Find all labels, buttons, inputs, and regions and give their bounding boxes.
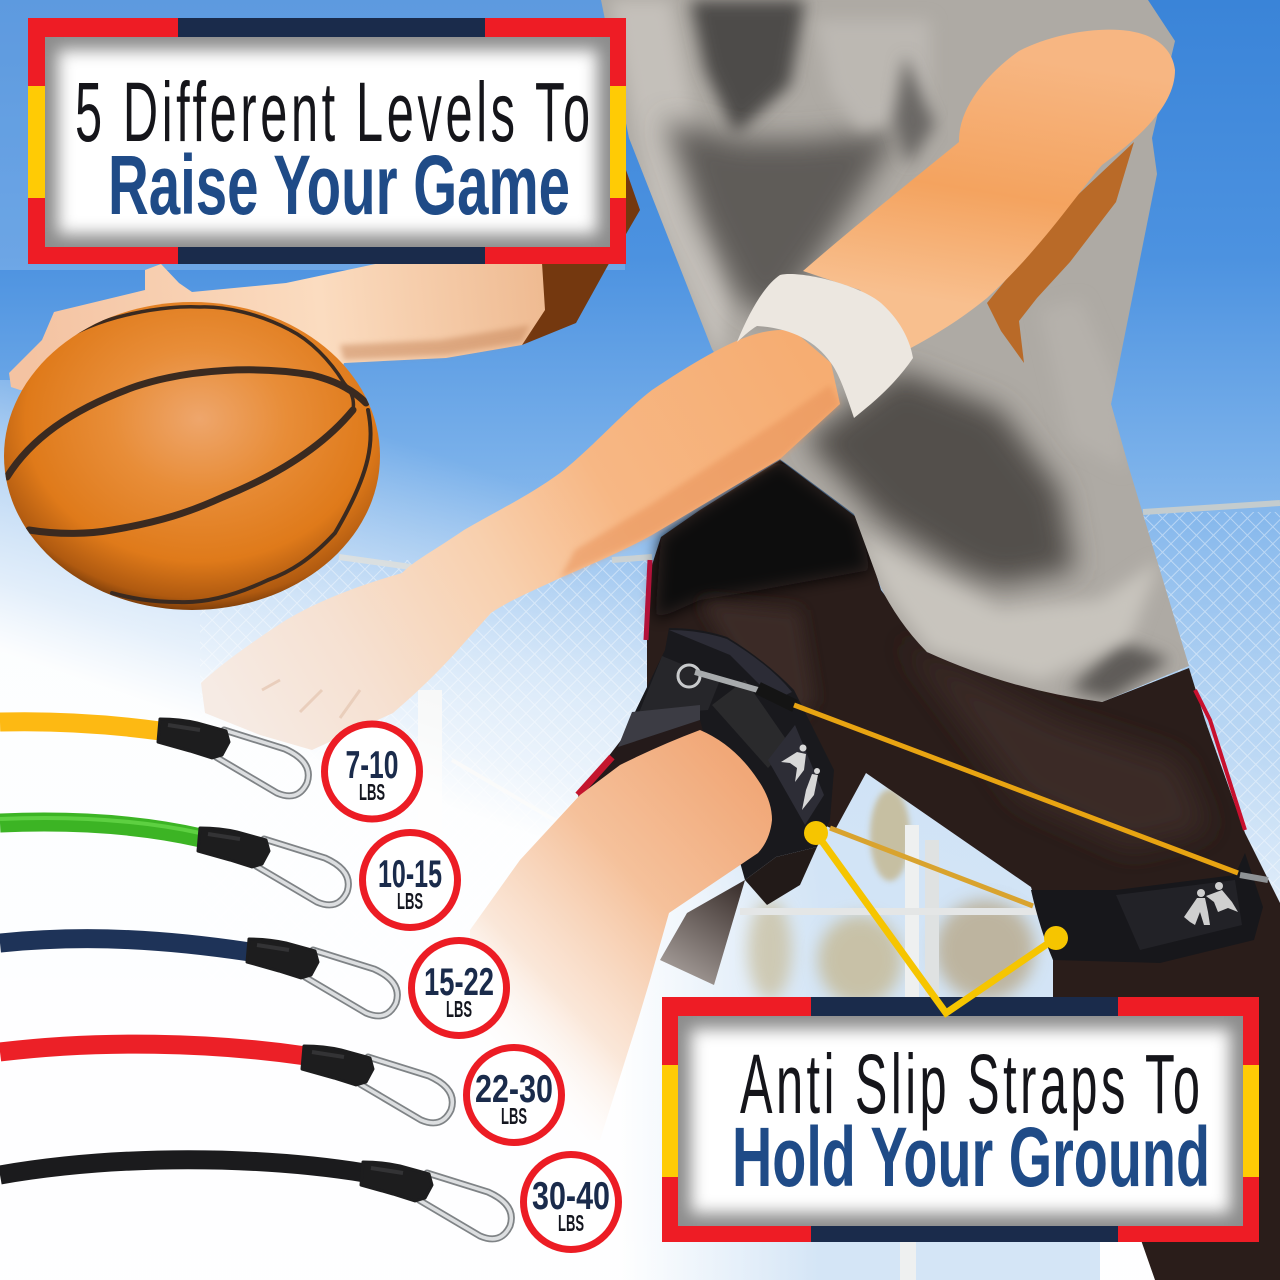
badge: 22-30 LBS: 22-30 [475, 1068, 553, 1111]
thigh strap [618, 628, 834, 880]
badge: 10-15 LBS [362, 832, 458, 928]
shorts [646, 460, 1280, 1280]
band: yellow 7-10 lbs [0, 719, 308, 796]
background: fence and trees behind the legs [620, 770, 1100, 1280]
badge: 15-22 LBS: 15-22 [424, 961, 494, 1004]
band: black 30-40 lbs [0, 1160, 511, 1239]
far arm holding the ball [9, 170, 640, 400]
resistance tube to thigh [794, 705, 1238, 873]
basketball [4, 302, 380, 610]
badge: 10-15 LBS: LBS [397, 888, 423, 914]
shirt [601, 0, 1189, 702]
band: red 22-30 lbs [0, 1044, 452, 1123]
badge: 7-10 LBS [324, 724, 420, 819]
near upper arm [803, 30, 1175, 349]
badge: 10-15 LBS: 10-15 [378, 853, 442, 896]
background: pale strip behind top box [0, 0, 625, 270]
badge: 7-10 LBS: LBS [359, 779, 385, 805]
badge: 22-30 LBS [466, 1048, 562, 1142]
badge: 22-30 LBS: LBS [501, 1103, 527, 1129]
badge: 7-10 LBS: 7-10 [346, 744, 398, 787]
badge: 30-40 LBS: 30-40 [532, 1175, 610, 1218]
band: green 10-15 lbs [0, 818, 348, 905]
white wristband [737, 274, 913, 418]
red trim at knee [578, 757, 612, 795]
torso skin seen through armhole [987, 142, 1134, 363]
panel: bottom callout box [662, 997, 1259, 1242]
panel: top heading box [28, 18, 626, 264]
dark shorts below strap with red trim [578, 715, 725, 810]
callout line one: Anti Slip Straps To [740, 1037, 1200, 1131]
front leg [470, 730, 772, 1140]
shorts flap fading out [660, 880, 745, 985]
badge: 15-22 LBS [412, 940, 506, 1036]
badge: 30-40 LBS: LBS [558, 1210, 584, 1236]
waist strap [1031, 853, 1268, 963]
heading line one: 5 Different Levels To [75, 65, 590, 159]
strap logo: two players [781, 744, 820, 810]
badge: 15-22 LBS: LBS [446, 996, 472, 1022]
shorts hem under strap [745, 847, 817, 905]
background: chain-link fence [200, 503, 1280, 1012]
white fade overlay [0, 380, 1280, 1280]
heading line two: Raise Your Game [108, 138, 570, 232]
near forearm and far hand [201, 330, 840, 750]
callout pointer lines to straps [804, 821, 1068, 1013]
band: navy 15-22 lbs [0, 939, 397, 1016]
badge: 30-40 LBS [524, 1154, 618, 1250]
resistance tube behind leg [830, 828, 1033, 906]
